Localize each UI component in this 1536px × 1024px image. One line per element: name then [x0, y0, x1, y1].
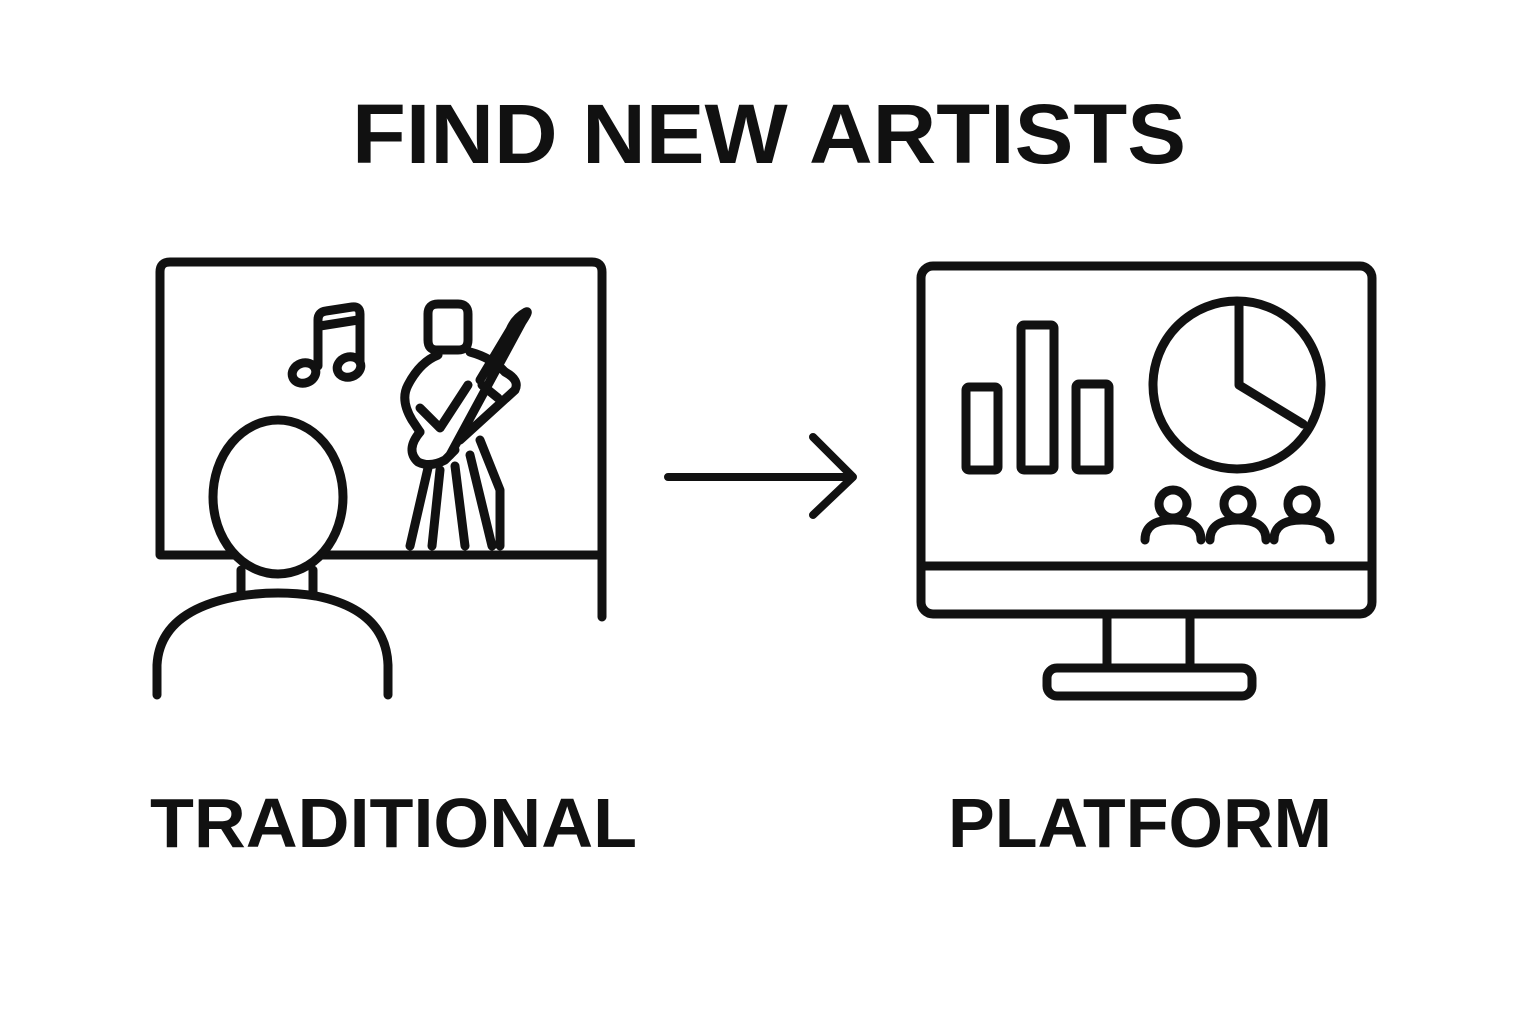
- icon: guitarist: [405, 304, 527, 546]
- label: platform: PLATFORM: [948, 784, 1332, 862]
- stage frame: [160, 262, 602, 617]
- label: traditional: TRADITIONAL: [150, 784, 637, 862]
- pie chart: [1153, 301, 1321, 469]
- arrow: [668, 437, 853, 515]
- panel: platform monitor: [921, 266, 1372, 696]
- title: FIND NEW ARTISTS: [352, 87, 1186, 181]
- bar chart: [966, 325, 1109, 470]
- icon: viewer: [157, 420, 388, 695]
- monitor stand: [1107, 614, 1190, 668]
- icon: music note: [289, 307, 364, 387]
- panel: traditional illustration: [157, 262, 602, 695]
- icon: users: [1145, 490, 1330, 540]
